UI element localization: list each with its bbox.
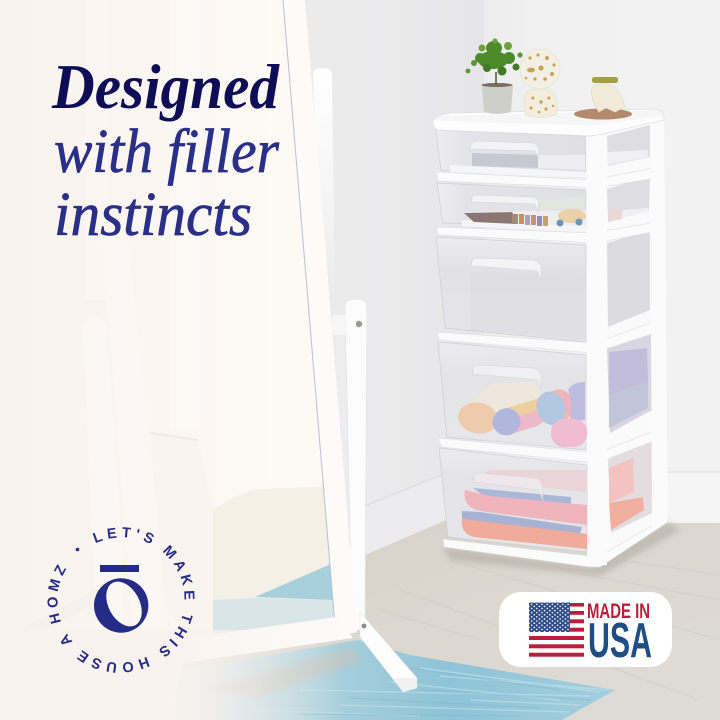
drawer 5: [439, 437, 652, 552]
USA label: USA: [588, 614, 652, 668]
floor: [0, 500, 720, 720]
fade over lower left floor: [0, 630, 345, 720]
folded towel blue: [473, 488, 571, 504]
towel purple: [568, 382, 585, 422]
faded curtain folds: [85, 0, 273, 480]
frame rails and lips: [436, 166, 668, 567]
drawer 5 handle: [473, 473, 543, 501]
seal dot: [76, 548, 79, 551]
folded towel salmon: [462, 519, 587, 549]
frame posts: [586, 116, 668, 566]
rug: [80, 640, 615, 720]
seal ring text: LET'S MAKE THIS HOUSE A HOMZ: [47, 527, 194, 673]
foot: [360, 612, 417, 692]
heading: [51, 52, 280, 249]
drawer 2: [437, 176, 650, 232]
folded towel pink: [465, 490, 587, 525]
faded curtain strip: [102, 240, 157, 720]
towel cream: [470, 382, 540, 412]
side view pink towels: [609, 458, 634, 503]
towel roll periwinkle: [489, 397, 548, 439]
folded towel blue middle: [462, 511, 582, 534]
side view purple towels: [609, 348, 648, 396]
top cap: [433, 109, 664, 136]
hinge: [332, 315, 347, 335]
badge: made in USA: [499, 592, 672, 668]
back leg: [345, 299, 367, 630]
baseboards: [365, 472, 720, 555]
reflected floor in mirror: [213, 487, 335, 640]
logo ring: [94, 578, 148, 633]
drawer 1: [436, 125, 650, 178]
drawer 2 handle: [471, 195, 539, 212]
icon: potted plant: [466, 38, 523, 114]
towel roll blue pink: [532, 385, 579, 429]
heading: Designed: [51, 52, 280, 122]
unit body: side frame: [586, 116, 668, 567]
mirror back post top: [313, 68, 335, 300]
mirror stand: [177, 0, 417, 692]
brand seal: [47, 527, 194, 673]
thin rear strut: [335, 335, 350, 560]
unit shadow: [443, 522, 680, 576]
heading: instincts: [54, 181, 252, 249]
drawer 4 handle: [472, 365, 541, 389]
mirror frame strip: [283, 0, 357, 636]
drawer 4: [438, 332, 652, 450]
floor wood grain: [380, 560, 720, 700]
faded wall corner: [0, 590, 95, 655]
bottom frame: [177, 617, 353, 664]
icon: tray with shell ornament: [574, 77, 632, 120]
icon: lattice sphere ornament: [520, 49, 560, 118]
icon: American flag: [529, 602, 584, 657]
made in label: MADE IN: [587, 600, 650, 623]
faded mirror back leg left: [83, 318, 125, 720]
storage drawer unit: [433, 38, 680, 576]
drawer 3 handle: [471, 258, 541, 280]
drawer 1 handle: [470, 141, 539, 158]
curtain and mirror glass overlay: [0, 0, 336, 720]
faded ghost object: [150, 435, 213, 645]
heading: with filler: [54, 118, 280, 186]
towel roll peach: [456, 399, 500, 437]
logo bar: [100, 565, 139, 572]
towel roll pink: [551, 419, 587, 447]
drawer 3: [436, 230, 650, 342]
